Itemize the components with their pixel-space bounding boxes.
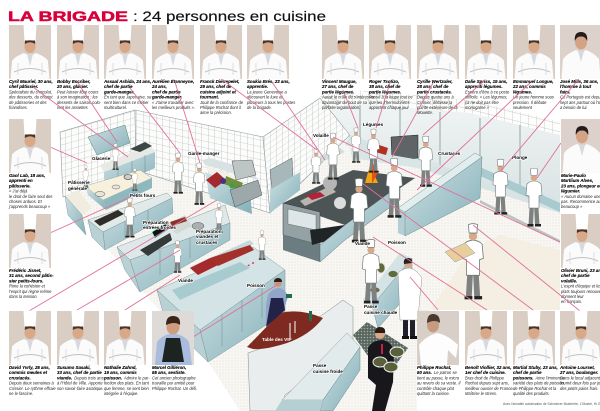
captions top row left: garde-manger. [103, 89, 134, 94]
captions bottom row left: intégrée à l'équipe. [104, 391, 138, 396]
captions bottom row right: Aime l'immense [534, 375, 565, 380]
station labels: Crustacés [438, 151, 461, 156]
captions right column: volaille. [561, 278, 577, 283]
captions top row right: ça ne doit pas être [465, 100, 499, 105]
captions bottom row left: 33 ans, chef de partie [57, 370, 102, 375]
checker mat [353, 322, 408, 380]
captions bottom row right: des petits pains frais. [560, 386, 598, 391]
captions top row left: des desserts, du chariot [9, 95, 53, 100]
garniture partition [398, 153, 482, 236]
portraits left column [9, 118, 51, 268]
captions left column: l'esprit qui règne même [9, 289, 52, 294]
petits fours counter [88, 193, 173, 250]
captions top row left: tournant. [200, 95, 219, 100]
kitchen illustration [60, 90, 560, 411]
captions bottom row right: meilleur ouvrier de France. [465, 386, 514, 391]
captions top row right: Passé à la loupe tout ce [369, 95, 413, 100]
captions top row left: friandises. [9, 105, 28, 110]
captions top row right: Un jeune homme sous [513, 95, 554, 100]
captions bottom row left: 55 ans, sestiste. [152, 370, 186, 375]
captions bottom row left: Crissier. Le rythme effraie [9, 386, 56, 391]
captions bottom row right: chef de partie [513, 370, 542, 375]
captions top row left: La jeune Genevoise a [247, 89, 288, 94]
captions right column: en français. [561, 299, 582, 304]
captions bottom row left: Depuis deux semaines à [9, 381, 55, 386]
chefs on the line [83, 128, 542, 303]
preparation counter [117, 205, 230, 292]
table des VIP [247, 311, 323, 349]
captions top row left: Bobby Escriber, [57, 79, 90, 84]
captions top row left: cuisine adjoint et [200, 89, 236, 94]
floor [63, 130, 560, 411]
captions top row right: que les Thermidoriens [369, 100, 410, 105]
captions top row left: Spécialiste du chocolat, [9, 89, 52, 94]
captions top row right: Aurait le crâle de s'intéresser [321, 95, 375, 100]
captions top row right: 38 ans, chef de [369, 84, 401, 89]
wall: window wall [320, 90, 560, 243]
captions top row left: plusieurs à tous les postes [246, 100, 295, 105]
cream floor right [417, 235, 560, 330]
station labels: Préparation [143, 220, 169, 225]
captions top row right: davantage du bout de sa [322, 100, 368, 105]
captions top row left: garde-manger. [151, 95, 182, 100]
captions top row right: Emmanuel Longue, [513, 79, 554, 84]
captions top row left: Philippe Rochat dont il [200, 105, 241, 110]
station labels: cuisine froide [313, 369, 343, 374]
wall: left tiles [60, 110, 136, 197]
passe cuisine froide [248, 300, 360, 411]
captions top row left: rent les assiettes [57, 105, 88, 110]
waiter figure [368, 327, 404, 411]
captions bottom row left: Philippe Rochat. Un défi. [152, 386, 197, 391]
captions top row left: sent bien dans ce métier [104, 100, 149, 105]
station labels: Glacerie [92, 156, 111, 161]
captions top row right: l'homme à tout [560, 84, 592, 89]
station labels: générale [68, 186, 87, 191]
captions left column: Gaol Lab, 18 ans, [9, 173, 45, 178]
captions right column [560, 173, 600, 304]
station labels: Légumes [363, 122, 384, 127]
captions top row right: a besoin de lui. [560, 105, 588, 110]
captions top row left: « J'aime travailler avec [152, 100, 194, 105]
captions top row right: 28 ans, chef de [416, 84, 449, 89]
captions top row left: découvert le luxe et [247, 95, 283, 100]
leader lines [29, 78, 580, 337]
station labels [68, 122, 528, 374]
captions top row left: Jouit de la confiance de [199, 100, 244, 105]
captions top row left [9, 79, 295, 115]
captions top row left: apprentie. [247, 84, 268, 89]
captions top row left: multiculturel. [104, 105, 127, 110]
captions right column: chef de partie [561, 273, 590, 278]
captions right column: Marie-Paulo [561, 173, 586, 178]
captions bottom row left: 19 ans, commis [104, 370, 137, 375]
captions bottom row left: Cet ancien photographe [152, 375, 196, 380]
captions top row left: chef de partie [152, 89, 181, 94]
captions bottom row right: au revers de sa veste. Il [417, 381, 461, 386]
captions bottom row left: Susumo Sasaki, [57, 365, 91, 370]
captions top row right: 27 ans, chef de [321, 84, 354, 89]
captions bottom row left: fection des plats. En tant [104, 381, 150, 386]
captions top row left: chef pâtissier. [9, 84, 38, 89]
captions bottom row right: 50 ans. [417, 370, 432, 375]
captions top row left: Peut laisser libre cours [57, 89, 98, 94]
captions top row right: difficile. « Les légumes, [465, 95, 508, 100]
captions bottom row left: Admire le par- [123, 375, 150, 380]
captions top row right [321, 79, 600, 115]
captions top row right: pression. Il débute [512, 100, 547, 105]
captions bottom row right: 27 ans, boulanger. [559, 370, 598, 375]
captions left column [8, 173, 54, 299]
captions top row left: 24 ans, [151, 84, 167, 89]
captions bottom row right: qualité des produits. [513, 391, 550, 396]
captions left column: « J'ai déjà [9, 189, 28, 194]
title: LA BRIGADE [8, 8, 128, 24]
captions top row right: monogame » [465, 105, 490, 110]
captions left column: 31 ans, second pâtis- [9, 273, 54, 278]
captions top row left: 29 ans, chef de [199, 84, 232, 89]
captions top row left: chef de partie [104, 84, 133, 89]
station labels: Plonge [512, 155, 528, 160]
station labels: entrées froides [143, 225, 176, 230]
station labels: Poisson [388, 240, 406, 245]
captions top row left: Franck Dietrepelet, [200, 79, 240, 84]
captions left column: pâtisserie. [8, 183, 31, 188]
portraits bottom row left [9, 310, 146, 365]
captions top row right: Dalie Spriss, 19 ans, [465, 79, 507, 84]
captions top row right: légumes. [513, 89, 532, 94]
captions bottom row left: Depuis trois ans [73, 375, 104, 380]
pastry station [65, 170, 152, 235]
captions top row right: partie légumes. [321, 89, 354, 94]
captions top row right: Roger Tsotizo, [369, 79, 399, 84]
station labels: Poisson [247, 283, 265, 288]
station labels: viandes et [196, 234, 219, 239]
captions bottom row left: Marcel Gilliéron, [152, 365, 186, 370]
station labels: Préparation [196, 229, 222, 234]
captions left column: Frédéric Jisnet, [9, 268, 41, 273]
captions top row left: Assaal Ashida, 24 ans, [103, 79, 151, 84]
station labels: Passe [364, 304, 378, 309]
captions top row left: aime la précision. [200, 110, 232, 115]
glacerie counter [100, 142, 155, 190]
captions bottom row right: Antoine Lourset, [559, 365, 595, 370]
captions bottom row left: David Yvrly, 25 ans, [9, 365, 50, 370]
captions top row left: de pâtisseries et des [9, 100, 47, 105]
captions bottom row left: commis meules et [9, 370, 48, 375]
captions left column: apprenti en [9, 178, 33, 183]
captions top row right: pointe extérieure de la [416, 105, 458, 110]
captions bottom row left: ne le fascine. [9, 391, 33, 396]
wall: back tiles [135, 110, 270, 213]
captions left column: sier petits-fours. [9, 278, 43, 283]
wall: corner tiles [263, 98, 350, 213]
sommelier figure [266, 278, 292, 327]
captions bottom row right: 1er chef de cuisine. [465, 370, 506, 375]
captions left column: dans la tension. [9, 294, 38, 299]
captions top row right: Depuis quatre ans à [417, 95, 454, 100]
station labels: Table des VIP [262, 337, 292, 342]
captions bottom row right: Maîtrise le stress. [465, 391, 497, 396]
captions bottom row right: tient au passe, le micro [417, 375, 460, 380]
captions bottom row right: Philippe Rochat, [417, 365, 451, 370]
captions left column: le droit de faire seul des [9, 194, 52, 199]
fish counter [157, 240, 285, 362]
station labels: Pâtisserie [68, 180, 90, 185]
portraits right column [561, 119, 600, 268]
captions top row right: Vincent Maugue, [322, 79, 357, 84]
captions right column: légumier. [561, 189, 580, 194]
captions top row right: Espère d'être à ce poste [465, 89, 510, 94]
captions top row left: les meilleurs produits ». [152, 105, 195, 110]
captions bottom row right: Martial Stuby, 23 ans, [513, 365, 558, 370]
glacerie wall cabinets [88, 125, 130, 155]
title [8, 8, 326, 24]
captions top row left: de la brigade. [247, 105, 272, 110]
captions right column: donnent leur [561, 294, 584, 299]
station labels: Petits fours [130, 193, 156, 198]
captions top row left: 20 ans, glacier. [56, 84, 88, 89]
station labels: Volaille [313, 133, 329, 138]
captions bottom row left: son savoir-faire asiatique. [57, 386, 104, 391]
captions top row right: apprenti légumes. [465, 84, 503, 89]
central range [270, 148, 415, 262]
captions right column: 23 ans, plongeur et [560, 183, 600, 188]
captions top row left: Cyril Mauriel, 30 ans, [9, 79, 53, 84]
chef Philippe Rochat figure [398, 258, 422, 339]
captions bottom row right: Benoît Viollier, 32 ans, [465, 365, 511, 370]
captions top row left: Soukia Brés, 23 ans, [247, 79, 290, 84]
station labels: Viande [355, 241, 370, 246]
captions top row right: faire. [560, 89, 570, 94]
captions bottom row left: que femme, se sent bien [104, 386, 150, 391]
captions bottom row right: Dans le local adjacent, [560, 375, 600, 380]
captions bottom row right: contrôle chaque plat [417, 386, 455, 391]
captions left column: j'apprends beaucoup » [8, 204, 51, 209]
captions bottom row right: poissons. [512, 375, 534, 380]
captions top row right: partie légumes. [368, 89, 401, 94]
captions bottom row left: travaille par amitié pour [152, 381, 195, 386]
title: : 24 personnes en cuisine [133, 9, 326, 24]
portrait: Philippe Rochat [417, 311, 459, 365]
station labels: Viande [178, 278, 193, 283]
captions bottom row right [417, 365, 600, 396]
captions bottom row left [9, 365, 197, 396]
captions bottom row right: quittant la cuisine. [417, 391, 450, 396]
station labels: cuisine chaude [364, 310, 398, 315]
captions top row right: 22 ans, commis [512, 84, 546, 89]
station labels: Garde-manger [188, 151, 220, 156]
portraits bottom row right [465, 310, 600, 365]
back range and oven [350, 135, 440, 170]
captions top row right: partie crustacés. [416, 89, 452, 94]
captions bottom row right: Rochat depuis sept ans, [465, 381, 509, 386]
captions right column: Martlium Alves, [561, 178, 593, 183]
captions bottom row right: de Philippe Rochat et la [513, 386, 557, 391]
captions top row right: Cyrille Wertzuler, [417, 79, 453, 84]
captions top row left: desserts de saison colo- [57, 100, 102, 105]
captions bottom row left: à l'Hôtel de Ville. Apporte [57, 381, 103, 386]
captions top row right: Mouette. [417, 110, 433, 115]
captions top row right: apportent chaque jour [369, 105, 409, 110]
passe cuisine chaude [363, 253, 412, 328]
captions top row right: parfaite organisation. [321, 105, 360, 110]
captions bottom row left: Nathalie Zahnd, [104, 365, 137, 370]
station labels: crustacés [196, 240, 218, 245]
captions bottom row right: Le patron se [433, 370, 458, 375]
captions bottom row right: Bras droit de Philippe [465, 375, 505, 380]
captions bottom row left: poisson. [103, 375, 122, 380]
captions bottom row left: crustacés. [9, 375, 31, 380]
food tray [445, 243, 475, 262]
captions top row left: En tant que Japonaise, se [104, 95, 152, 100]
captions bottom row right: variété des plats de poisson [513, 381, 564, 386]
captions top row right: Crissier, délaisse la [417, 100, 453, 105]
garde-manger counter [202, 158, 262, 214]
captions top row right: José Mills, 36 ans, [560, 79, 598, 84]
captions left column: choses arduos. Et [9, 199, 43, 204]
captions top row left: à son imagination : les [57, 95, 98, 100]
captions top row right: seulement [513, 105, 533, 110]
captions top row left: Aurélien Étanneyne, [151, 79, 194, 84]
portrait: Marcel Gilliéron [152, 311, 194, 365]
portraits top row right [322, 24, 600, 79]
captions bottom row left: viande. [57, 375, 72, 380]
captions right column: beaucoup » [561, 204, 583, 209]
station labels: Passe [313, 363, 327, 368]
captions left column: Rime la cohésion et [9, 284, 46, 289]
portraits top row left [9, 24, 289, 79]
